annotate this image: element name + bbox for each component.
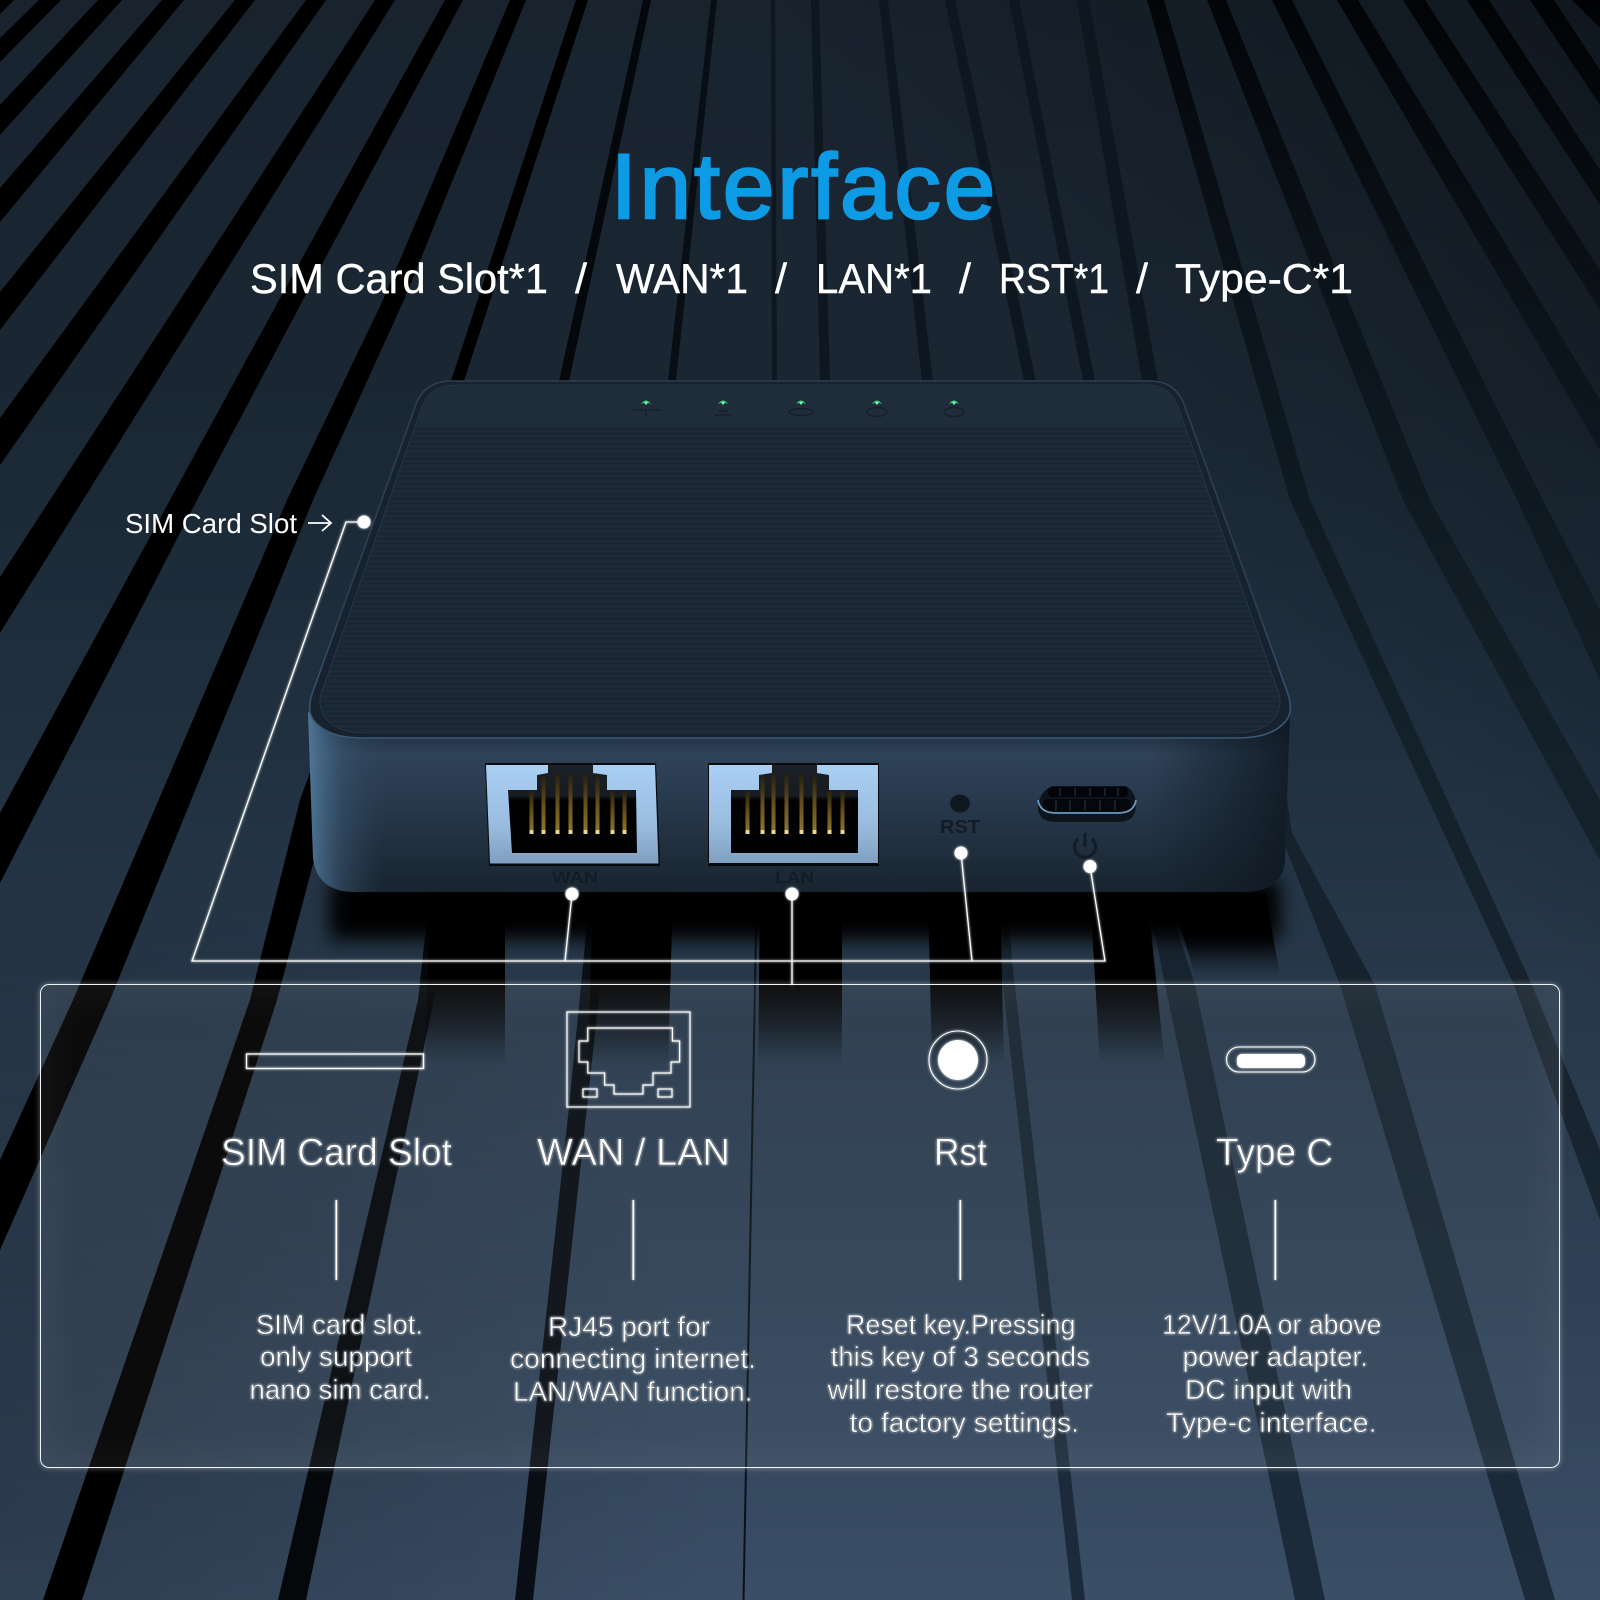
leader line network	[192, 522, 1105, 985]
panel: interface details	[40, 984, 1560, 1468]
dot: RST	[954, 846, 968, 860]
divider	[632, 1200, 634, 1280]
icon: RJ45 socket	[567, 1012, 690, 1107]
description: WAN / LAN: LAN/WAN function.	[513, 1376, 752, 1407]
WAN count: WAN*1	[616, 255, 748, 302]
USB Type-C port	[1038, 786, 1136, 822]
divider	[1274, 1200, 1276, 1280]
description: SIM: nano sim card.	[250, 1374, 430, 1405]
LAN port	[708, 763, 879, 866]
description: Rst	[826, 1309, 1093, 1438]
RST count: RST*1	[999, 255, 1109, 302]
description: Rst: this key of 3 seconds	[830, 1341, 1090, 1372]
router top face	[310, 381, 1290, 738]
heading: WAN / LAN: WAN / LAN	[537, 1132, 730, 1174]
dot: SIM	[358, 516, 370, 528]
description: Rst: Reset key.Pressing	[846, 1309, 1076, 1340]
WAN port	[485, 763, 660, 866]
divider	[336, 1200, 337, 1280]
separator: /	[1136, 255, 1148, 302]
description: Type C: DC input with	[1185, 1374, 1352, 1405]
description: WAN / LAN: connecting internet.	[510, 1343, 756, 1374]
reset pinhole	[950, 794, 970, 812]
description: WAN / LAN	[510, 1311, 756, 1407]
icon: SIM slot	[246, 1054, 424, 1068]
description: Type C	[1162, 1309, 1382, 1438]
router device	[308, 381, 1290, 892]
heading: Type C: Type C	[1216, 1132, 1333, 1174]
heading: Rst: Rst	[934, 1132, 987, 1174]
router front body	[308, 712, 1290, 892]
description: Rst: will restore the router	[826, 1374, 1093, 1405]
arrow: SIM label to slot	[308, 515, 331, 531]
SIM Card Slot callout label: SIM Card Slot	[125, 508, 297, 539]
icon: reset button	[929, 1031, 987, 1089]
LAN label: LAN	[775, 868, 814, 887]
heading: SIM Card Slot: SIM Card Slot	[221, 1132, 452, 1174]
leader lines and dots	[192, 516, 1105, 985]
power symbol	[1074, 833, 1096, 857]
description: WAN / LAN: RJ45 port for	[548, 1311, 710, 1342]
column: Rst	[826, 1031, 1093, 1438]
title: Interface	[611, 136, 995, 238]
dot: LAN	[786, 888, 798, 900]
separator: /	[959, 255, 971, 302]
panel contents	[221, 1012, 1382, 1438]
description: SIM	[250, 1309, 430, 1405]
icon: Type-C connector	[1226, 1047, 1315, 1072]
column: Type C	[1162, 1047, 1382, 1438]
WAN label: WAN	[552, 868, 598, 887]
dot: WAN	[566, 888, 578, 900]
description: Type C: 12V/1.0A or above	[1162, 1309, 1382, 1340]
LAN count: LAN*1	[816, 255, 932, 302]
separator: /	[575, 255, 587, 302]
divider	[960, 1200, 961, 1280]
separator: /	[775, 255, 787, 302]
description: SIM: SIM card slot.	[256, 1309, 423, 1340]
subtitle: interface summary	[250, 255, 1353, 302]
column: SIM card slot	[221, 1054, 452, 1405]
SIM count: SIM Card Slot*1	[250, 255, 548, 302]
description: SIM: only support	[260, 1341, 412, 1372]
description: Rst: to factory settings.	[850, 1407, 1079, 1438]
Type-C count: Type-C*1	[1175, 255, 1353, 302]
description: Type C: power adapter.	[1182, 1341, 1368, 1372]
dot: Type-C	[1084, 860, 1096, 873]
description: Type C: Type-c interface.	[1166, 1407, 1376, 1438]
RST label: RST	[940, 817, 980, 837]
column: WAN / LAN	[510, 1012, 756, 1407]
status LEDs	[632, 400, 964, 417]
